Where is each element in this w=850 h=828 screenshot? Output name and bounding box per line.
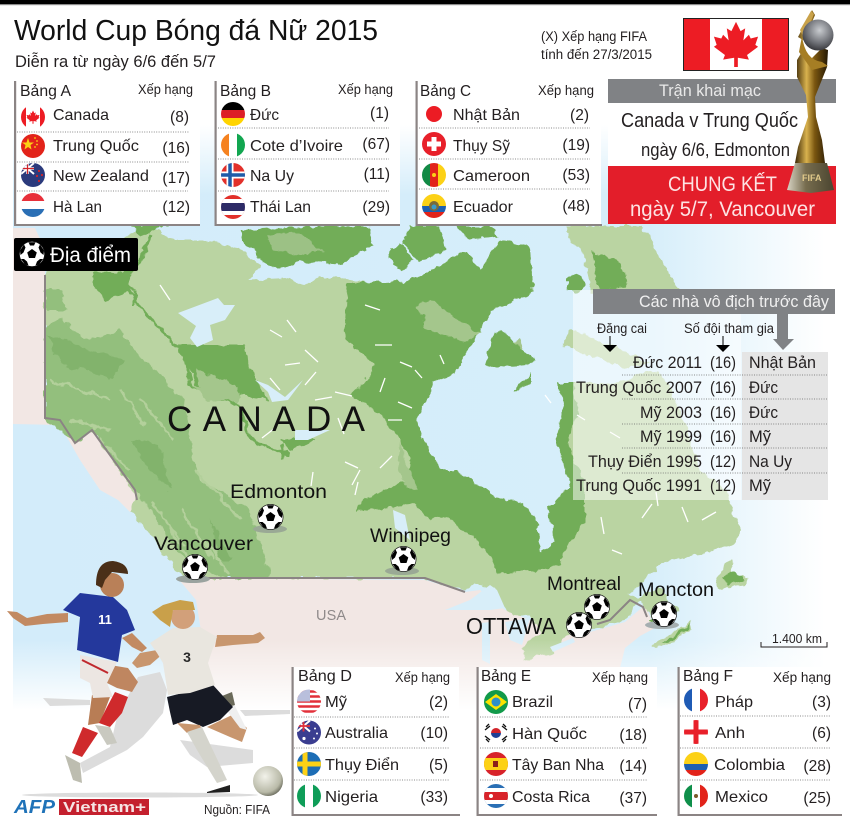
panel: Group A: Canada [53,107,109,124]
panel: Group D: Xếp hạng [395,670,450,685]
flag: Netherlands [21,193,45,217]
flag: Canada [21,107,45,127]
player 1 boots [95,725,117,745]
panel: Group F: Colombia [714,757,785,774]
FIFA ranking note [541,29,652,62]
champions rows: Na Uy [749,453,793,471]
flag: Australia [297,720,321,744]
flag: Spain [484,752,508,776]
city: Montreal: Montreal [547,574,621,595]
panel: Group F [678,667,842,816]
player 1 socks [99,692,128,727]
flag: Germany [221,102,245,126]
flag: France [684,688,708,712]
Arctic islands [130,226,745,645]
panel: Group B [214,81,400,226]
panel: Group A: Bảng A [20,83,71,100]
icon: World Cup trophy [787,10,834,193]
panel: opening match and final: Trận khai mạc [659,81,761,100]
flag: USA [297,690,321,714]
flag: New Zealand [21,163,45,187]
player 2 front leg [177,723,202,733]
flag: South Korea [484,721,508,745]
large lakes [178,298,410,540]
champions rows: (12) [710,477,736,495]
scale bar: 1.400 km [772,631,822,646]
panel: Group B: Thái Lan [250,199,311,216]
panel: Group D: (33) [420,789,448,806]
player 1 legs [88,695,110,725]
Atlantic provinces and Baffin [563,226,748,648]
flag: Colombia [684,752,708,776]
dark green boreal band [345,240,584,573]
panel: Group A: Hà Lan [53,199,102,216]
city: Edmonton [230,482,327,533]
flag: England [684,720,708,744]
panel: Group C: Ecuador [453,199,514,216]
city: Vancouver: Vancouver [154,534,254,555]
champions rows: Mỹ [749,477,772,495]
champions rows: (16) [710,404,736,422]
final banner: CHUNG KẾT [668,173,777,196]
western mountains [45,290,270,578]
panel: Group E: Brazil [512,694,553,711]
panel: Group C: Bảng C [420,83,471,100]
panel: Group B: Na Uy [250,168,294,185]
flag: Thailand [221,195,245,219]
subtitle: Diễn ra từ ngày 6/6 đến 5/7 [15,52,216,71]
panel: Group D: Thụy Điển [325,756,399,774]
panel: Group F: Xếp hạng [773,670,831,685]
champions rows: (12) [710,453,736,471]
panel: Group E: (7) [628,696,647,713]
champions rows: Đức [749,404,778,422]
champions header: Các nhà vô địch trước đây [639,292,829,311]
panel: Group C: Cameroon [453,168,530,185]
column label: hosts [597,321,647,352]
logo: Vietnam+ [59,799,149,816]
city: Moncton: Moncton [638,580,714,601]
champions rows: Đức [749,379,778,397]
champions rows: Trung Quốc 1991 [576,477,702,495]
champions rows: (16) [710,379,736,397]
title: World Cup Bóng đá Nữ 2015 [14,15,378,47]
illustration: two football players: 3 [183,649,191,665]
panel: Group D: Mỹ [325,694,347,711]
logo: AFP: AFP [13,797,56,817]
panel: Group E: Tây Ban Nha [512,757,604,774]
flag: Brazil [484,690,508,714]
champions rows: (16) [710,428,736,446]
panel: Group F: (25) [803,790,831,807]
flag: China [21,134,45,158]
panel: Group C [416,81,602,226]
illustration: two football players: 11 [98,612,112,627]
opening match teams: Canada v Trung Quốc [621,110,798,132]
champions header [593,289,835,314]
panel: Group D: Bảng D [298,668,352,685]
arrow: to winners column [773,314,794,350]
panel: Group C: (48) [562,198,590,215]
column label: teams: Số đội tham gia [684,321,774,336]
panel: Group E: Hàn Quốc [512,726,587,743]
panel: Group F: (3) [812,694,831,711]
champions rows: Đức 2011 [633,354,702,372]
panel: Group C: Xếp hạng [538,83,594,98]
player 2 head [152,600,195,629]
borders [45,275,647,624]
top black bar [0,0,850,5]
panel: Group B: (29) [362,199,390,216]
player 1 head [96,561,128,597]
panel: Group E: (37) [619,790,647,807]
flag: Switzerland [422,132,446,156]
flag: Sweden [297,752,321,776]
panel: previous champions [573,289,835,500]
Mackenzie and lakes corridor [93,235,290,460]
lake specks [160,285,716,554]
top and bottom fade [13,125,850,195]
city: Montreal [547,574,621,620]
panel: opening match and final [608,79,836,224]
flag: Costa Rica [484,784,508,808]
player 1 jersey [63,593,135,662]
champions rows [576,354,816,495]
flag: Mexico [684,784,708,808]
panel: Group A: New Zealand [53,168,149,185]
panel: Group D: Nigeria [325,789,378,806]
panel: Group D: (5) [429,757,448,774]
panel: Group E: Costa Rica [512,789,590,806]
champions rows: Mỹ [749,428,772,446]
source: Nguồn: FIFA [204,802,270,817]
panel: Group B: (11) [364,166,390,183]
darker ranges [47,335,232,560]
final banner: ngày 5/7, Vancouver [630,198,815,221]
city: Ottawa: OTTAWA [466,613,557,639]
icon: World Cup trophy: FIFA [802,173,822,183]
panel: Group E: Xếp hạng [592,670,648,685]
panel: Group A [14,81,200,226]
label: USA: USA [316,608,346,624]
panel: Group E: Bảng E [481,668,531,685]
champions rows: Nhật Bản [749,354,816,372]
panel: Group B: Đức [250,107,279,124]
land masses with irregular coasts [45,226,748,660]
flag: Cameroon [422,163,446,187]
panel: Group B: Cote d’Ivoire [250,138,343,155]
panel: Group F: (6) [812,725,831,742]
player 2 arms [132,632,265,668]
panel: Group A: (12) [162,199,190,216]
panel: Group E: (18) [619,727,647,744]
icon: Canadian flag [684,18,788,70]
player 2 back leg [207,715,247,742]
flag: Ecuador [422,194,446,218]
panel: Group F: Mexico [715,789,768,806]
panel: Group B: (1) [370,105,389,122]
player 1 arms [7,611,147,652]
column label: teams [684,321,774,352]
label: Canada: CANADA [167,400,366,439]
panel: Group F: (28) [803,758,831,775]
city: Winnipeg [370,526,451,575]
panel: Group F: Pháp [715,694,753,711]
champions rows: Trung Quốc 2007 [576,379,702,397]
Great Lakes [445,585,575,664]
player 1 shorts [80,655,117,698]
flag: Nigeria [297,784,321,808]
panel: Group D: (10) [420,725,448,742]
player shadows [22,672,290,798]
panel: Group E [476,667,657,816]
illustration: two football players [7,561,290,798]
panel: Group B: Xếp hạng [338,82,393,97]
city: Winnipeg: Winnipeg [370,526,451,547]
champions rows: Mỹ 1999 [640,428,702,446]
panel: Group A: (8) [170,109,189,126]
football [253,766,283,796]
FIFA ranking note: (X) Xếp hạng FIFA [541,29,647,44]
panel: Group D [292,667,460,816]
panel: Group D: Australia [325,725,388,742]
Canada land base [45,228,740,660]
panel: Group C: (2) [570,107,589,124]
opening match header [608,79,836,103]
panel: Group A: (16) [162,140,190,157]
panel: Group B: Bảng B [220,83,271,100]
champions rows: (16) [710,354,736,372]
flag: Ivory Coast [221,133,245,157]
flag: Norway [221,163,245,187]
opening match date: ngày 6/6, Edmonton [641,140,790,160]
panel: Group A: Xếp hạng [138,82,193,97]
final banner [608,166,836,224]
panel: Group C: (53) [562,167,590,184]
panel: Group A: Trung Quốc [53,138,139,155]
badge: venues [14,238,138,271]
USA territory [180,578,655,720]
player 2 shorts [167,685,233,727]
panel: Group F: Anh [715,725,745,742]
badge: venues: Địa điểm [50,244,131,267]
champions rows: Mỹ 2003 [640,404,702,422]
panel: Group B: (67) [362,136,390,153]
panel: Group C: (19) [562,137,590,154]
city: Edmonton: Edmonton [230,482,327,503]
column label: hosts: Đăng cai [597,321,647,336]
light pockets in the band [398,300,525,490]
panel: Group E: (14) [619,758,647,775]
panel: Group F: Bảng F [683,668,733,685]
panel: Group C: Nhật Bản [453,107,520,124]
champions rows: Thụy Điển 1995 [588,453,702,471]
Alaska [13,228,137,512]
city: Moncton [638,580,714,629]
panel: Group D: (2) [429,694,448,711]
logo: Vietnam+: Vietnam+ [63,800,146,816]
city: Vancouver [154,534,254,583]
panel: Group C: Thụy Sỹ [453,138,510,155]
player 2 shirt [150,627,217,695]
panel: Group A: (17) [162,170,190,187]
FIFA ranking note: tính đến 27/3/2015 [541,47,652,62]
flag: Japan [426,106,442,122]
